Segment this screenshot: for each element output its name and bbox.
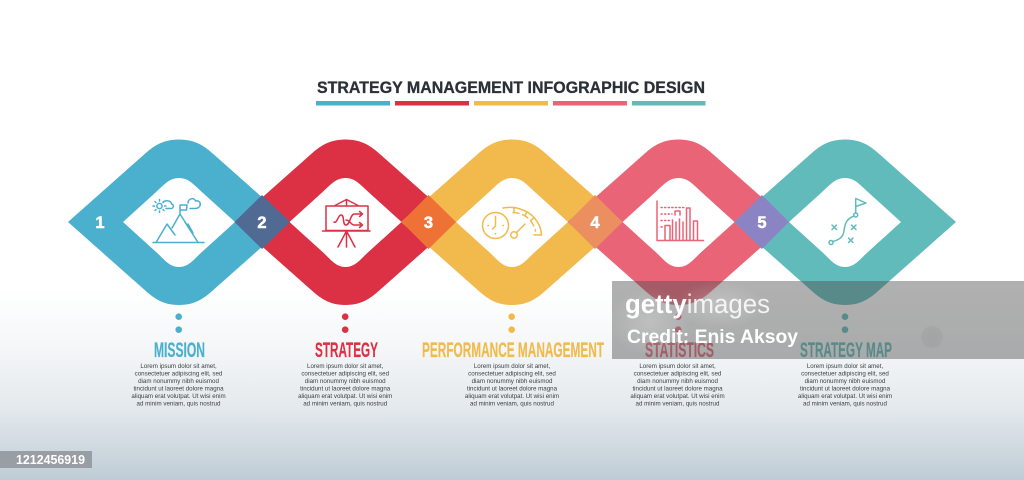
connector dots: mission — [175, 313, 182, 333]
text block: performance management: consectetuer adipiscing elit, sed — [468, 370, 556, 378]
text block: strategy: diam nonummy nibh euismod — [305, 378, 386, 385]
image id badge: 1212456919 — [16, 453, 85, 467]
text block: statistics: tincidunt ut laoreet dolore magna — [632, 386, 723, 392]
connector dots: performance management — [508, 313, 515, 333]
text block: strategy: tincidunt ut laoreet dolore magna — [300, 386, 391, 392]
text block: strategy: aliquam erat volutpat. Ut wisi enim — [298, 393, 392, 400]
text block: strategy map: Lorem ipsum dolor sit amet, — [807, 363, 883, 370]
text block: strategy map: aliquam erat volutpat. Ut wisi enim — [798, 393, 892, 400]
watermark: credit band: gettyimages — [625, 289, 770, 319]
icon: clock and gauge — [482, 207, 542, 238]
panel: ring 5 strategy map — [734, 140, 956, 305]
icon: strategy map route — [829, 198, 866, 244]
number 2: 2 — [257, 214, 267, 232]
heading: strategy: STRATEGY — [315, 339, 378, 362]
text block: strategy: ad minim veniam, quis nostrud — [303, 400, 388, 408]
text block: performance management: diam nonummy nibh euismod — [472, 378, 553, 385]
connector dots: strategy — [342, 313, 349, 333]
heading: mission: MISSION — [154, 339, 205, 362]
heading: performance management: PERFORMANCE MANAGEMENT — [422, 339, 604, 362]
text block: statistics — [630, 363, 725, 408]
icon: presentation board — [322, 200, 370, 247]
text block: mission: diam nonummy nibh euismod — [138, 378, 219, 385]
text block: strategy map: diam nonummy nibh euismod — [805, 378, 886, 385]
title colour bars — [316, 101, 706, 106]
text block: statistics: diam nonummy nibh euismod — [637, 378, 718, 385]
text block: strategy map: tincidunt ut laoreet dolore magna — [800, 386, 891, 392]
text block: statistics: Lorem ipsum dolor sit amet, — [639, 363, 716, 370]
heading: statistics: STATISTICS — [645, 339, 714, 362]
connector dots: statistics — [675, 313, 682, 333]
overlap diamond 5 — [734, 195, 789, 249]
text block: statistics: aliquam erat volutpat. Ut wisi enim — [630, 393, 725, 400]
overlap diamond 4 — [568, 195, 622, 249]
icon: mountain with flag — [153, 199, 204, 242]
text block: statistics: consectetuer adipiscing elit, sed — [634, 370, 722, 378]
overlap diamond 2 — [234, 195, 290, 249]
title: STRATEGY MANAGEMENT INFOGRAPHIC DESIGN — [317, 78, 705, 97]
text block: strategy map: consectetuer adipiscing elit, sed — [801, 370, 889, 378]
text block: mission: ad minim veniam, quis nostrud — [137, 400, 221, 408]
connector dots: strategy map — [842, 313, 848, 333]
number 1: 1 — [95, 214, 105, 232]
number 5: 5 — [757, 214, 767, 232]
image id badge — [0, 451, 92, 468]
text block: performance management: ad minim veniam, quis nostrud — [470, 400, 555, 408]
text block: mission: Lorem ipsum dolor sit amet, — [140, 363, 217, 370]
text block: statistics: ad minim veniam, quis nostrud — [636, 400, 720, 408]
text block: performance management — [465, 363, 559, 408]
panel: ring 4 statistics — [568, 140, 790, 305]
text block: strategy: consectetuer adipiscing elit, sed — [301, 370, 390, 378]
panel: ring 3 performance management — [401, 140, 623, 305]
text block: strategy map — [798, 363, 892, 408]
number 3: 3 — [424, 214, 433, 232]
watermark: credit band: Credit: Enis Aksoy — [627, 327, 798, 348]
watermark: credit band — [608, 281, 1024, 359]
number 4: 4 — [590, 214, 600, 232]
panel: ring 1 mission — [68, 140, 290, 305]
text block: mission: consectetuer adipiscing elit, sed — [135, 370, 223, 378]
overlap diamond 3 — [402, 195, 456, 249]
text block: performance management: Lorem ipsum dolor sit amet, — [474, 363, 550, 370]
icon: statistics bar chart — [657, 201, 704, 240]
text block: mission: tincidunt ut laoreet dolore magna — [133, 386, 224, 392]
text block: strategy: Lorem ipsum dolor sit amet, — [307, 363, 384, 370]
text block: strategy map: ad minim veniam, quis nostrud — [803, 400, 888, 408]
text block: performance management: aliquam erat volutpat. Ut wisi enim — [465, 393, 559, 400]
text block: mission: aliquam erat volutpat. Ut wisi enim — [131, 393, 226, 400]
text block: mission — [131, 363, 226, 408]
heading: strategy map: STRATEGY MAP — [800, 339, 892, 362]
panel: ring 2 strategy — [234, 140, 456, 305]
text block: performance management: tincidunt ut laoreet dolore magna — [467, 386, 558, 392]
text block: strategy — [298, 363, 392, 408]
